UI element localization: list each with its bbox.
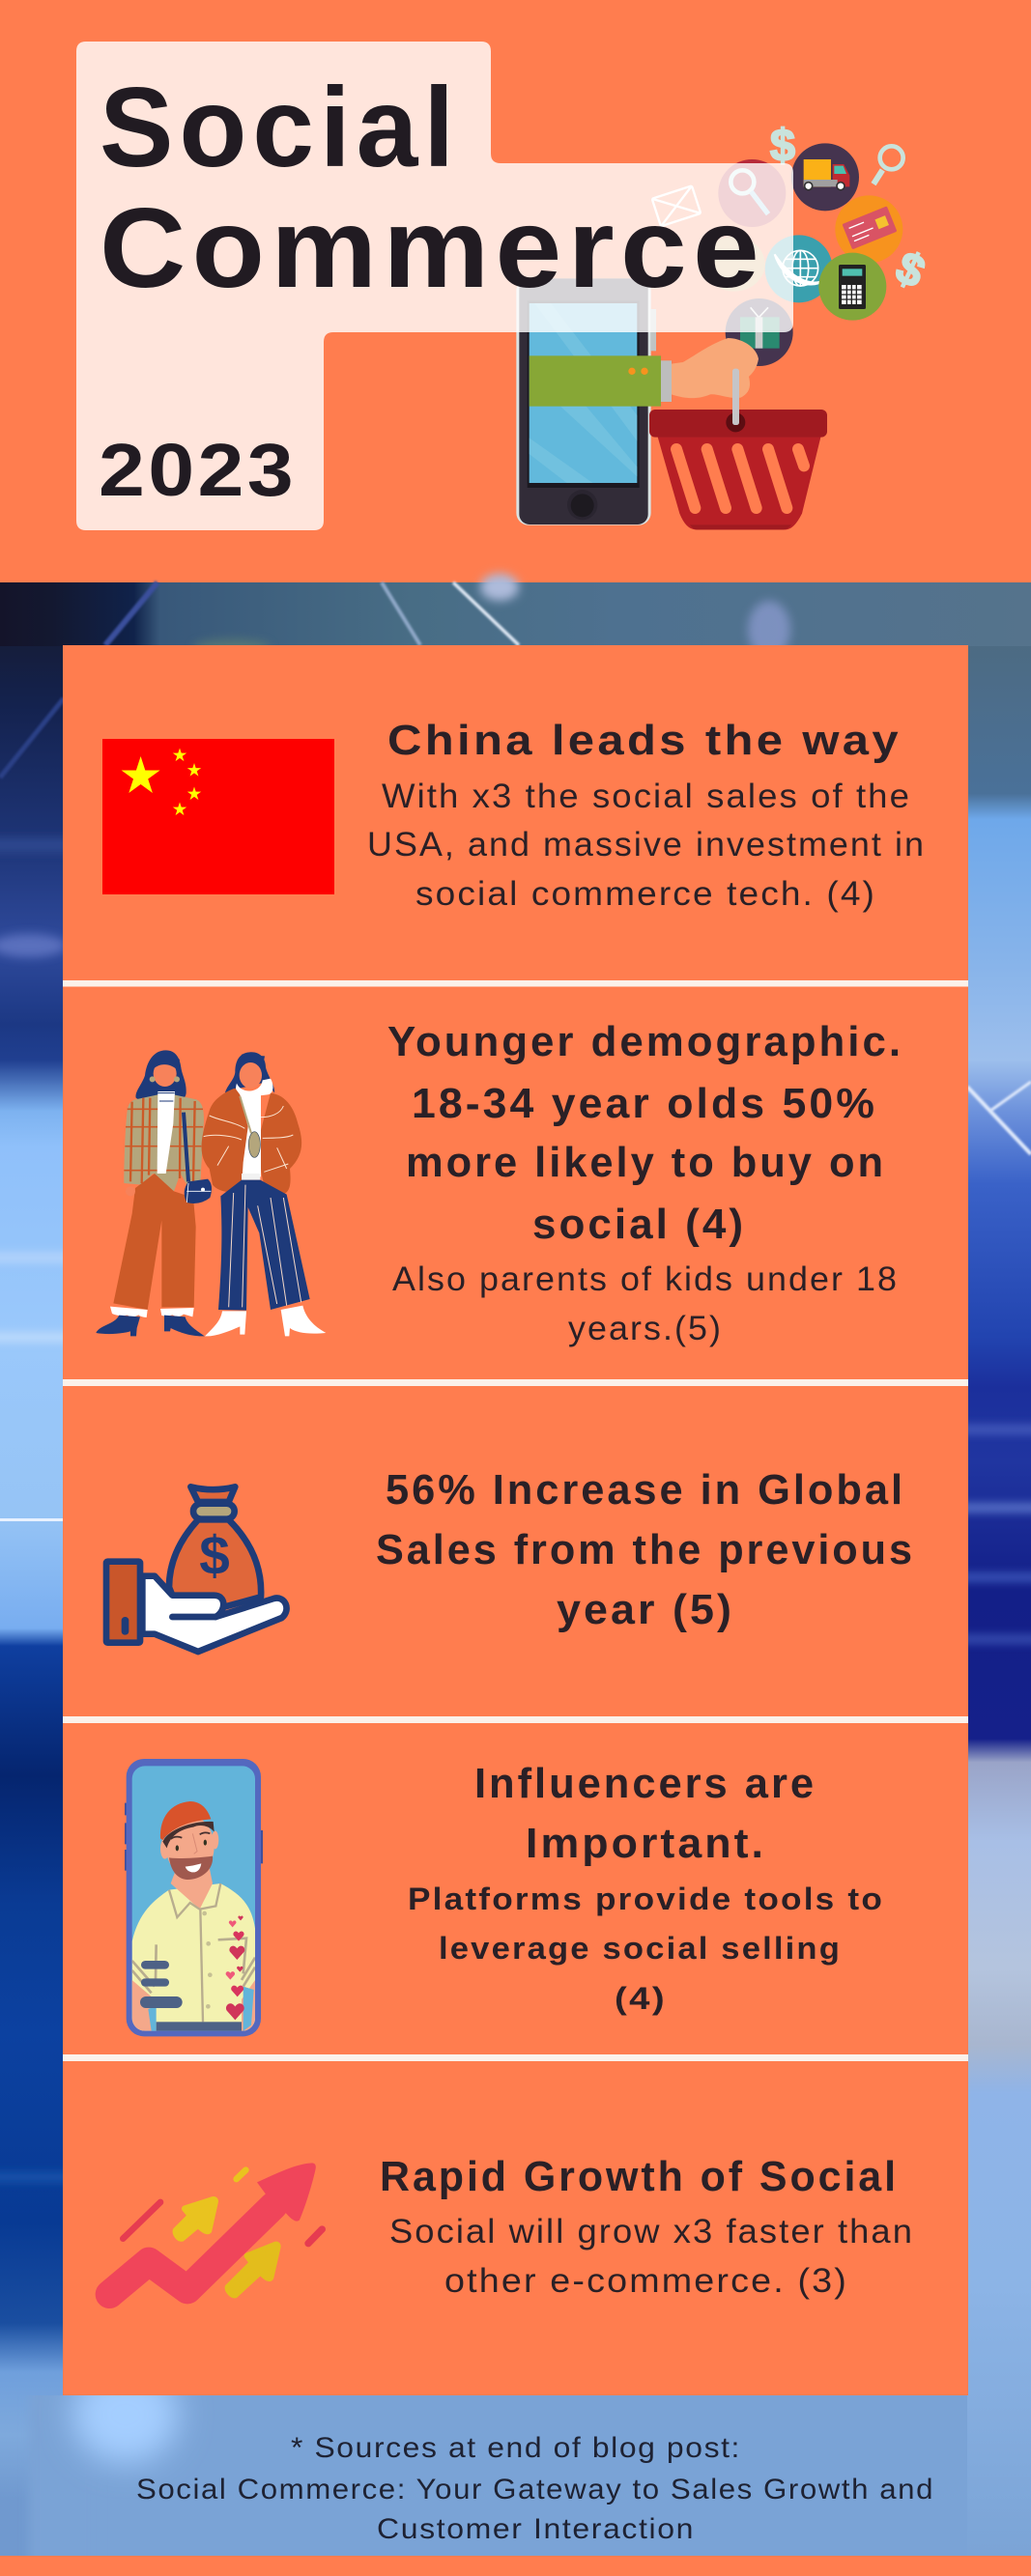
icon: globe circle [765,235,833,302]
icon: magnifier [873,146,903,184]
heading: Younger demographic: Younger demographic. [387,1018,903,1065]
icon: dollar top: $ [770,120,795,170]
heading: Influencers are important: Important. [526,1820,766,1867]
icon: delivery truck circle [791,143,859,211]
title [100,64,765,311]
heading: 56% increase [376,1466,915,1633]
heading: Younger demographic: more likely to buy on [406,1139,886,1186]
icon: influencer on phone [125,1759,263,2036]
panel: Influencers [125,1759,884,2036]
bottom orange strip [0,2556,1031,2576]
footer: sources note: Customer Interaction [377,2513,695,2545]
heading: 56% increase: Sales from the previous [376,1526,915,1573]
icon: dollar right: $ [889,241,932,297]
heading: Influencers are important: Influencers are [474,1760,816,1807]
background photo: blurred blue light [0,574,1031,2576]
footer: sources note: Social Commerce: Your Gateway to Sales Growth and [136,2474,934,2505]
icon: faint money circle behind the title [703,237,765,292]
text: China detail: With x3 the social sales of the [382,778,911,815]
text: growth detail: Social will grow x3 faster than [389,2213,914,2250]
panel: Younger demographic [96,1018,903,1347]
text: platforms detail: leverage social selling [439,1931,842,1966]
text: platforms detail: Platforms provide tools to [408,1882,884,1916]
year: 2023 [99,429,297,512]
icon: calculator circle [818,253,886,321]
heading: 56% increase: 56% Increase in Global [386,1466,905,1514]
panel: Rapid growth [109,2153,914,2300]
footer: sources note [136,2432,934,2545]
heading: China leads the way: China leads the way [387,717,902,764]
panel: China [102,717,926,913]
text: China detail: social commerce tech. (4) [415,875,876,913]
text: China detail [367,778,926,913]
panel: Global sales [106,1466,915,1652]
text: platforms detail: (4) [615,1981,667,2016]
text: growth detail [389,2213,914,2300]
heading: Younger demographic [387,1018,903,1248]
title panel: translucent cream shape [76,42,793,530]
shopping basket [649,369,827,529]
text: parents detail [392,1260,899,1347]
heading: 56% increase: year (5) [557,1586,734,1633]
icon: hand holding money bag: $ [199,1526,230,1587]
icon: two young women [96,1050,326,1336]
icon: envelope [652,185,701,226]
heading: Rapid Growth of Social: Rapid Growth of Social [380,2153,899,2200]
title: Social [100,64,460,190]
icon: China flag [102,739,334,894]
footer: sources note: * Sources at end of blog post: [291,2432,741,2464]
main panel with five sections [63,645,968,2395]
heading: Influencers are important [474,1760,816,1867]
icon: search circle [718,159,786,227]
heading: Younger demographic: 18-34 year olds 50% [412,1080,877,1127]
text: platforms detail [408,1882,884,2016]
icon: hand holding money bag [106,1486,287,1652]
hand holding basket [530,338,759,407]
icon: rising arrows [109,2163,322,2295]
icon: gift circle [726,298,793,366]
header illustration: phone, hand, basket and shopping icons [516,120,932,529]
text: growth detail: other e-commerce. (3) [444,2262,848,2300]
icon: credit card circle [835,195,902,263]
smartphone [516,278,656,525]
text: parents detail: Also parents of kids under 18 [392,1260,899,1298]
title: Commerce [100,184,765,311]
text: parents detail: years.(5) [568,1310,723,1347]
heading: Younger demographic: social (4) [532,1201,746,1248]
text: China detail: USA, and massive investment in [367,826,926,863]
